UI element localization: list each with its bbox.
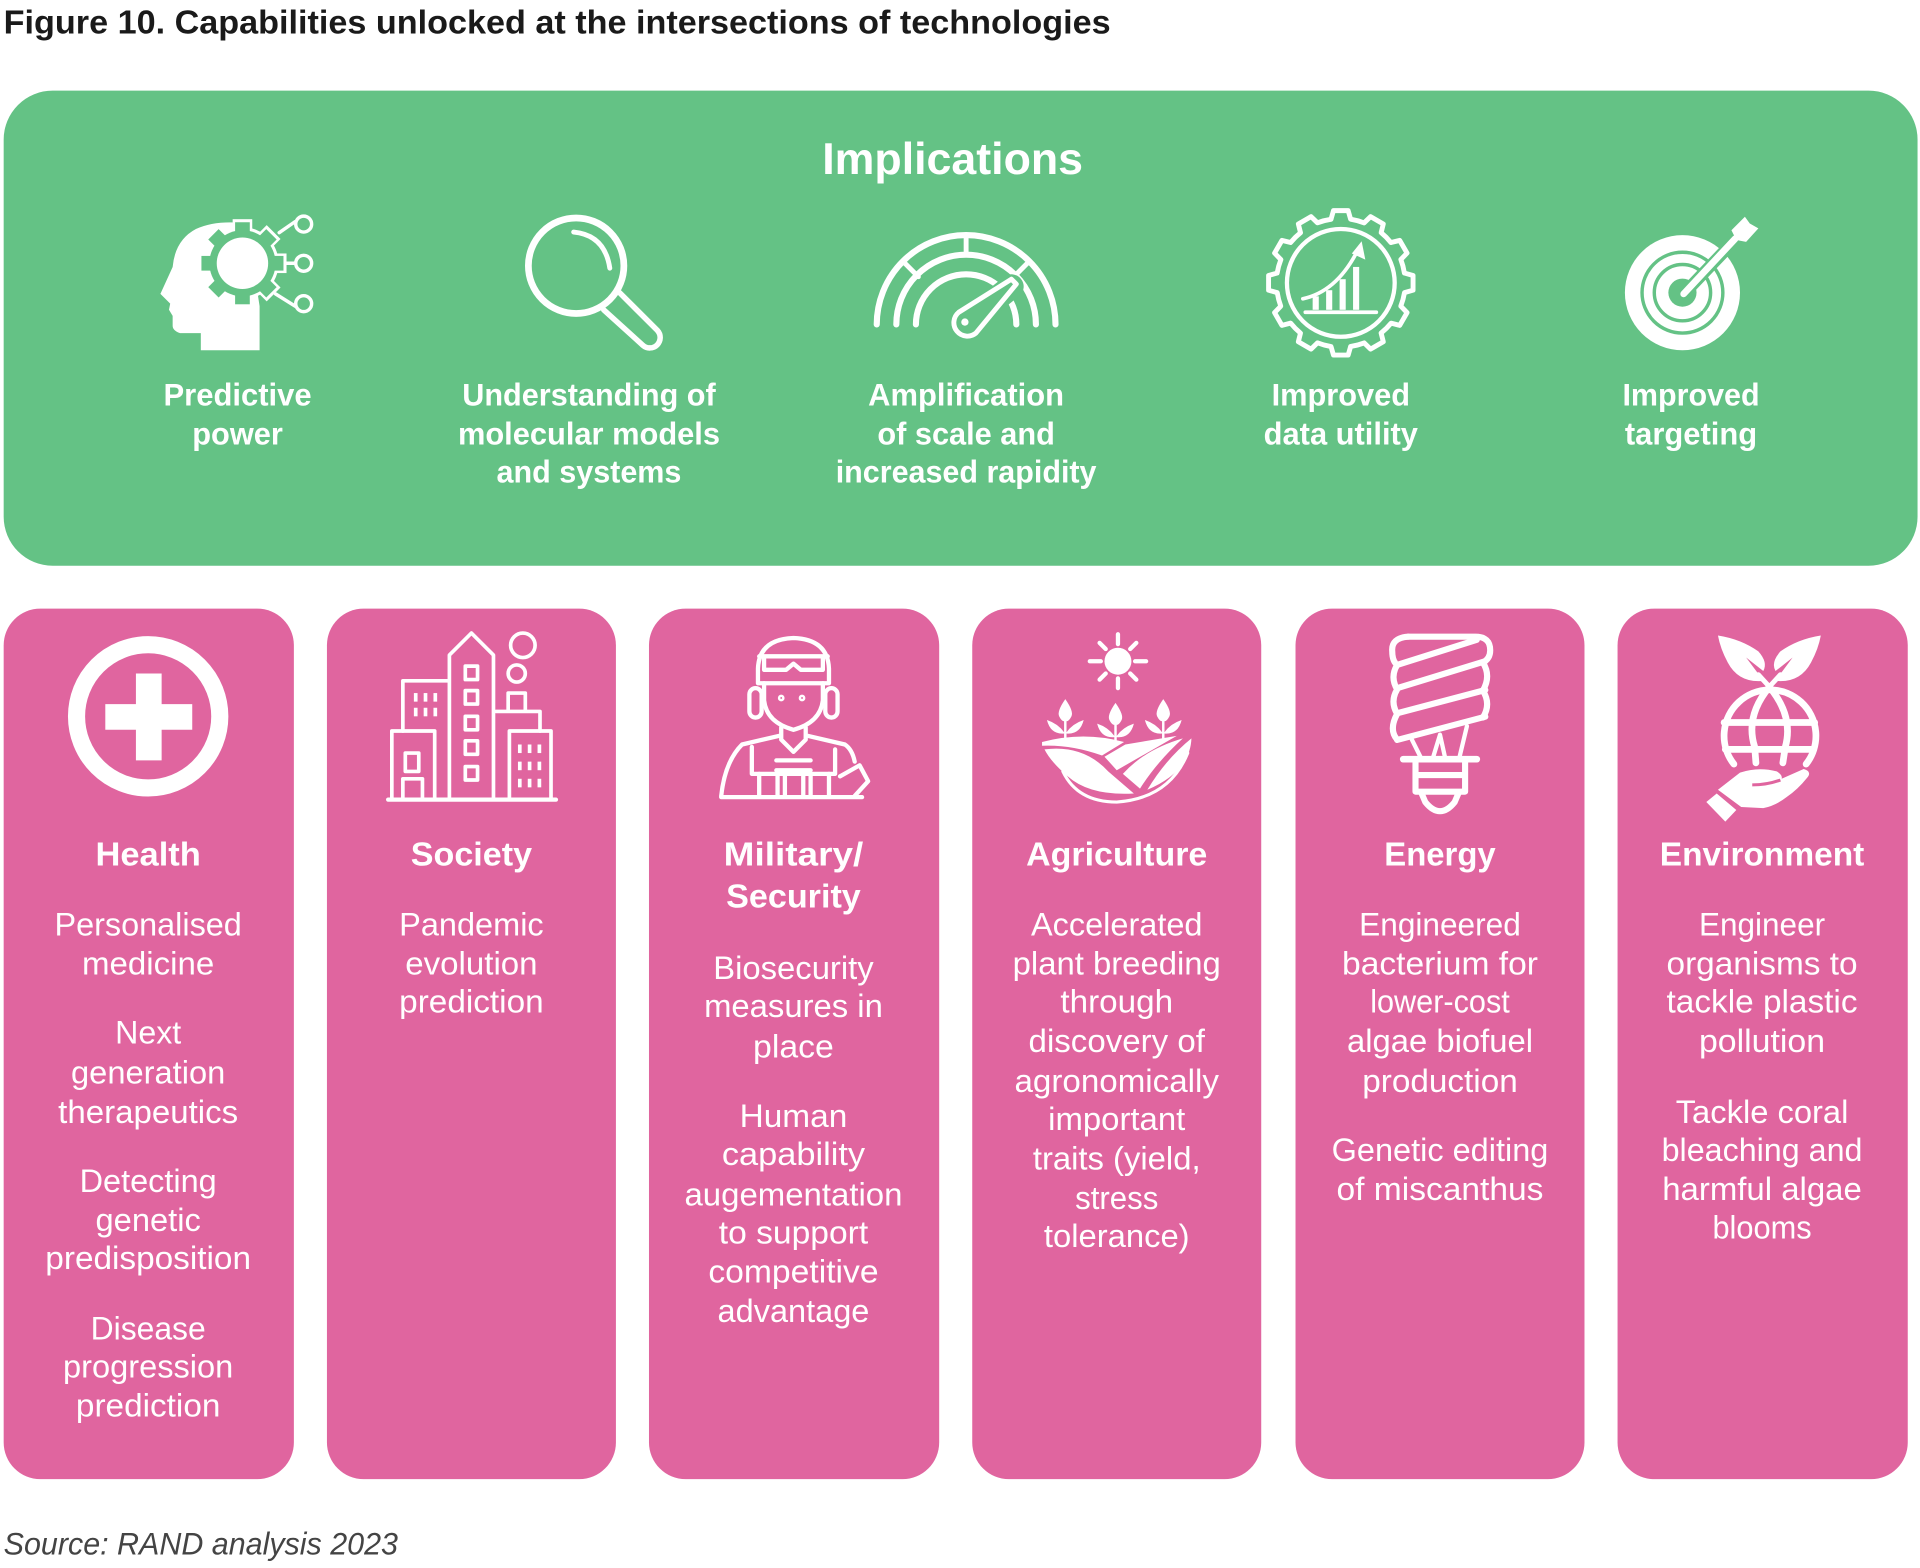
- text: military applications: measures in: [704, 988, 883, 1024]
- text: health applications: generation: [71, 1055, 225, 1091]
- icon: city buildings: [388, 633, 556, 800]
- panel: environment: [1618, 609, 1908, 1479]
- text: agriculture applications: stress: [1075, 1180, 1158, 1216]
- heading: society: Society: [411, 837, 532, 874]
- text: energy applications: algae biofuel: [1347, 1023, 1533, 1059]
- text: health applications: predisposition: [45, 1240, 251, 1276]
- panel: military and security: [649, 609, 939, 1479]
- text: military applications: augementation: [684, 1177, 902, 1213]
- item: improved data utility: [1264, 209, 1419, 451]
- text: health applications: therapeutics: [58, 1094, 238, 1130]
- panel: implications: [4, 91, 1918, 566]
- text: military applications: to support: [719, 1214, 868, 1250]
- heading: environment: Environment: [1660, 837, 1864, 874]
- label: amplification of scale and increased rapidity: of scale and: [877, 416, 1055, 451]
- card background: [327, 609, 616, 1479]
- icon: gear with growth chart: [1267, 209, 1415, 357]
- text: agriculture applications: traits (yield,: [1033, 1140, 1201, 1176]
- text: energy applications: [1332, 907, 1548, 1207]
- label: improved targeting: [1622, 377, 1760, 451]
- label: predictive power: Predictive: [163, 377, 312, 412]
- text: military applications: capability: [722, 1136, 866, 1172]
- icon: magnifying glass: [528, 218, 660, 348]
- text: environment applications: harmful algae: [1662, 1171, 1862, 1207]
- icon: spiral light bulb: [1392, 637, 1490, 811]
- text: agriculture applications: Accelerated: [1031, 907, 1202, 943]
- text: society applications: evolution: [405, 946, 538, 982]
- text: military applications: advantage: [718, 1293, 869, 1329]
- text: environment applications: [1662, 907, 1862, 1246]
- text: environment applications: tackle plastic: [1667, 984, 1858, 1020]
- icon: head with gear: [160, 216, 312, 350]
- text: environment applications: pollution: [1699, 1023, 1825, 1059]
- text: agriculture applications: through: [1060, 984, 1173, 1020]
- text: military applications: competitive: [708, 1254, 879, 1290]
- text: energy applications: of miscanthus: [1337, 1171, 1543, 1207]
- text: military applications: Human: [740, 1098, 847, 1134]
- item: understanding of molecular models: [458, 218, 720, 489]
- text: environment applications: bleaching and: [1662, 1132, 1862, 1168]
- text: energy applications: Genetic editing: [1332, 1132, 1548, 1168]
- label: understanding of molecular models and systems: Understanding of: [462, 377, 716, 412]
- text: society applications: [399, 907, 544, 1020]
- text: society applications: Pandemic: [399, 907, 544, 943]
- icon: sun, plants and field: [1042, 634, 1191, 802]
- item: amplification of scale: [836, 235, 1097, 489]
- text: agriculture applications: tolerance): [1044, 1218, 1190, 1254]
- text: environment applications: Tackle coral: [1676, 1094, 1848, 1130]
- heading: agriculture: Agriculture: [1026, 837, 1207, 874]
- card background: [1296, 609, 1584, 1479]
- card background: [649, 609, 939, 1479]
- panel: society: [327, 609, 616, 1479]
- icon: target with arrow: [1625, 217, 1758, 350]
- panel background: green: [4, 91, 1918, 566]
- label: understanding of molecular models and systems: [458, 377, 720, 489]
- text: environment applications: organisms to: [1667, 946, 1858, 982]
- icon: speed gauge: [877, 235, 1056, 336]
- title: Figure 10. Capabilities unlocked at the intersections of technologies: [4, 5, 1111, 42]
- icon: plant, globe and hand: [1706, 636, 1821, 822]
- card background: [1618, 609, 1908, 1479]
- text: energy applications: Engineered: [1359, 907, 1521, 943]
- panel: energy: [1296, 609, 1584, 1479]
- text: energy applications: bacterium for: [1342, 946, 1538, 982]
- text: health applications: Disease: [91, 1311, 206, 1347]
- heading: implications: Implications: [822, 135, 1083, 184]
- item: predictive power: [160, 216, 312, 451]
- label: predictive power: [163, 377, 312, 451]
- text: energy applications: production: [1362, 1063, 1518, 1099]
- text: health applications: [45, 907, 251, 1424]
- text: energy applications: lower-cost: [1370, 984, 1510, 1020]
- text: agriculture applications: discovery of: [1029, 1023, 1206, 1059]
- text: military applications: place: [753, 1028, 834, 1064]
- heading: energy: Energy: [1384, 837, 1496, 874]
- text: health applications: prediction: [76, 1388, 220, 1424]
- panel: health: [4, 609, 294, 1479]
- text: health applications: genetic: [96, 1202, 201, 1238]
- icon: medical cross: [77, 645, 220, 788]
- text: environment applications: Engineer: [1699, 907, 1825, 943]
- label: amplification of scale and increased rapidity: increased rapidity: [836, 454, 1097, 489]
- text: agriculture applications: [1013, 907, 1221, 1254]
- label: understanding of molecular models and systems: molecular models: [458, 416, 720, 451]
- text: health applications: Detecting: [80, 1163, 217, 1199]
- card background: [4, 609, 294, 1479]
- label: improved data utility: data utility: [1264, 416, 1419, 451]
- text: agriculture applications: agronomically: [1014, 1063, 1220, 1099]
- card background: [972, 609, 1261, 1479]
- label: amplification of scale and increased rapidity: [836, 377, 1097, 489]
- heading: military / security: [724, 837, 864, 915]
- source note: Source: RAND analysis 2023: [4, 1525, 398, 1561]
- label: improved targeting: Improved: [1622, 377, 1760, 412]
- label: amplification of scale and increased rapidity: Amplification: [868, 377, 1064, 412]
- label: understanding of molecular models and systems: and systems: [497, 454, 681, 489]
- heading: military / security: Military/: [724, 837, 864, 874]
- text: military applications: Biosecurity: [713, 950, 874, 986]
- text: health applications: medicine: [82, 946, 214, 982]
- text: agriculture applications: important: [1048, 1101, 1185, 1137]
- item: improved targeting: [1622, 217, 1760, 451]
- text: agriculture applications: plant breeding: [1013, 946, 1221, 982]
- label: predictive power: power: [192, 416, 283, 451]
- text: society applications: prediction: [399, 984, 544, 1020]
- icon: soldier: [721, 638, 868, 797]
- label: improved data utility: [1264, 377, 1419, 451]
- text: health applications: Next: [115, 1014, 181, 1050]
- label: improved targeting: targeting: [1625, 416, 1757, 451]
- label: improved data utility: Improved: [1272, 377, 1410, 412]
- text: environment applications: blooms: [1712, 1210, 1812, 1246]
- text: military applications: [684, 950, 902, 1329]
- text: health applications: progression: [63, 1349, 233, 1385]
- heading: health: Health: [96, 837, 201, 874]
- heading: military / security: Security: [726, 878, 861, 915]
- text: health applications: Personalised: [54, 907, 242, 943]
- panel: agriculture: [972, 609, 1261, 1479]
